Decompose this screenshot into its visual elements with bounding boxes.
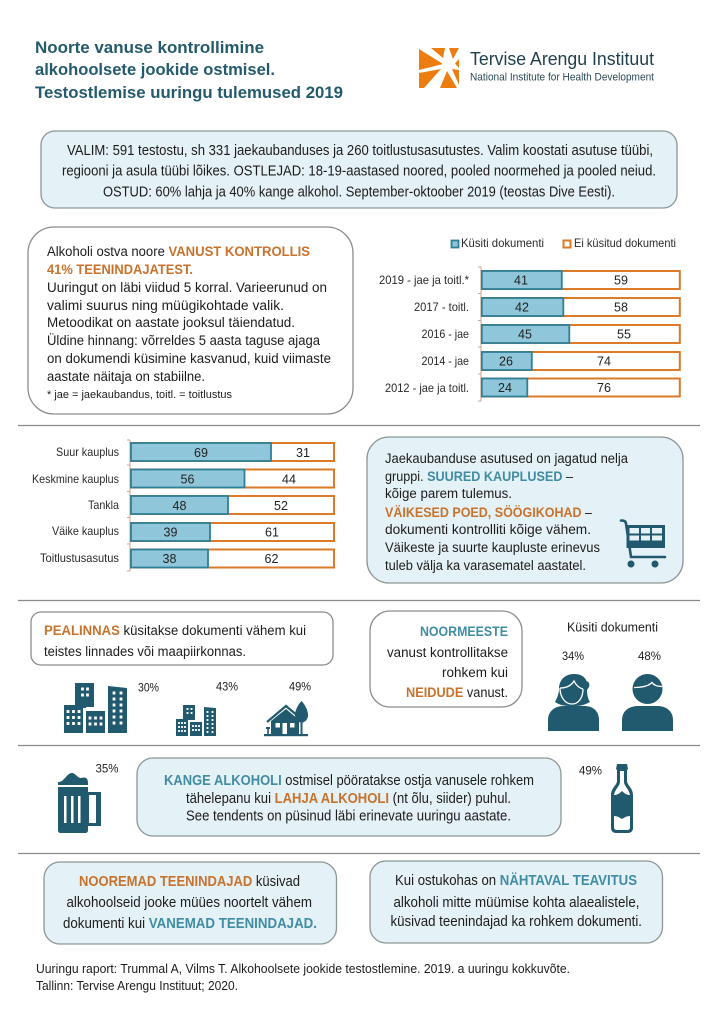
- icon: bottle: [611, 764, 633, 833]
- value: male: 48%: [638, 649, 661, 663]
- logo: Tervise Arengu Instituut: National Institute for Health Development: [470, 72, 654, 84]
- panel: age control summary: Üldine hinnang: võrreldes 5 aasta taguse ajaga: [47, 333, 320, 348]
- value: female: 34%: [562, 649, 584, 663]
- panel: capital city callout: PEALINNAS küsitakse dokumenti vähem kui: [44, 623, 306, 638]
- panel: age control summary: 41% TEENINDAJATEST.: [47, 262, 193, 277]
- bar chart: document checks by survey year: 42: [515, 300, 529, 314]
- panel: age control summary: Metoodikat on aastate jooksul täiendatud.: [47, 315, 295, 330]
- bar chart: document checks by outlet type: 52: [274, 499, 288, 513]
- bar chart: document checks by survey year: 45: [518, 328, 532, 342]
- bar chart: document checks by survey year: 2017 - toitl.: [414, 300, 469, 314]
- title: [35, 38, 343, 102]
- panel: younger vs older servers: NOOREMAD TEENINDAJAD küsivad: [79, 874, 300, 890]
- panel: younger vs older servers: dokumenti kui VANEMAD TEENINDAJAD.: [63, 916, 317, 932]
- panel: capital city callout: teistes linnades või maapiirkonnas.: [44, 644, 246, 659]
- icon: man: [622, 672, 673, 731]
- panel: retail outlet groups: VÄIKESED POED, SÖÖGIKOHAD –: [385, 505, 592, 520]
- bar chart: document checks by outlet type: 44: [282, 472, 296, 486]
- bar chart: document checks by outlet type: Tankla: [88, 498, 119, 512]
- bar chart: document checks by survey year: 76: [597, 381, 611, 395]
- bar chart: document checks by survey year: 24: [498, 381, 512, 395]
- source note: Tallinn: Tervise Arengu Instituut; 2020.: [36, 979, 238, 993]
- logo: Tervise Arengu Instituut: Tervise Arengu Instituut: [470, 49, 654, 69]
- bar chart: document checks by survey year: 58: [614, 300, 628, 314]
- panel: gender callout: [370, 611, 522, 707]
- bar chart: document checks by survey year: 55: [617, 328, 631, 342]
- bar chart: document checks by survey year: 26: [499, 354, 513, 368]
- panel: visible notice: Kui ostukohas on NÄHTAVAL TEAVITUS: [395, 872, 637, 889]
- panel: sample description: VALIM: 591 testostu, sh 331 jaekaubanduses ja 260 toitlustusasutustes. Valim koostati asutuse tüübi,: [67, 143, 653, 159]
- panel: capital city callout: [31, 612, 333, 665]
- bar chart: document checks by outlet type: 56: [181, 472, 194, 486]
- panel: visible notice: küsivad teenindajad ka rohkem dokumenti.: [390, 914, 642, 930]
- panel: strong vs light alcohol: KANGE ALKOHOLI ostmisel pööratakse ostja vanusele rohkem: [164, 773, 534, 789]
- bar chart: document checks by outlet type: 48: [173, 499, 186, 513]
- icon: shopping cart: [621, 520, 665, 568]
- icon: small town buildings: [176, 705, 216, 736]
- bar chart: document checks by outlet type: Toitlustusasutus: [40, 551, 119, 565]
- chart legend: Ei küsitud dokumenti: [574, 236, 676, 250]
- title: Testostlemise uuringu tulemused 2019: [35, 83, 343, 102]
- panel: gender callout: vanust kontrollitakse: [387, 645, 508, 660]
- panel: age control summary: Alkoholi ostva noore VANUST KONTROLLIS: [47, 244, 310, 259]
- panel: retail outlet groups: [367, 437, 683, 583]
- panel: retail outlet groups: Väikeste ja suurte kaupluste erinevus: [385, 540, 600, 555]
- panel: sample description: [41, 131, 677, 208]
- bar chart: document checks by outlet type: 31: [296, 446, 310, 460]
- panel: sample description: OSTUD: 60% lahja ja 40% kange alkohol. September-oktoober 2019 (teostas Dive Eesti).: [103, 184, 615, 200]
- panel: gender callout: NOORMEESTE: [420, 624, 508, 639]
- bar chart: document checks by survey year: 41: [514, 274, 528, 288]
- bar chart: document checks by outlet type: Keskmine kauplus: [32, 472, 119, 486]
- panel: retail outlet groups: dokumenti kontrolliti kõige vähem.: [385, 522, 591, 537]
- bar chart: document checks by outlet type: 61: [265, 526, 279, 540]
- value: large city: 30%: [138, 680, 159, 694]
- panel: age control summary: Uuringut on läbi viidud 5 korral. Varieerunud on: [47, 280, 327, 295]
- value: strong alcohol note: 35%: [96, 762, 119, 776]
- bar chart: document checks by outlet type: 39: [164, 526, 177, 540]
- panel: younger vs older servers: [44, 862, 336, 944]
- icon: beer mug: [58, 773, 101, 833]
- panel: retail outlet groups: Jaekaubanduse asutused on jagatud nelja: [385, 451, 628, 466]
- bar chart: document checks by survey year: 2014 - jae: [422, 354, 469, 368]
- bar chart: document checks by survey year: 2016 - jae: [422, 327, 469, 341]
- bar chart: document checks by outlet type: Väike kauplus: [52, 524, 119, 538]
- panel: retail outlet groups: gruppi. SUURED KAUPLUSED –: [385, 469, 573, 484]
- bar chart: document checks by survey year: 2019 - jae ja toitl.*: [379, 273, 469, 287]
- chart legend: [452, 236, 676, 250]
- panel: strong vs light alcohol: [137, 758, 561, 836]
- panel: strong vs light alcohol: tähelepanu kui LAHJA ALKOHOLI (nt õlu, siider) puhul.: [186, 791, 511, 807]
- panel: visible notice: alkoholi mitte müümise kohta alaealistele,: [394, 895, 640, 911]
- value: town: 43%: [216, 680, 238, 694]
- title: alkohoolsete jookide ostmisel.: [35, 60, 275, 79]
- panel: gender callout: rohkem kui: [442, 665, 508, 680]
- title: Noorte vanuse kontrollimine: [35, 38, 264, 57]
- bar chart: document checks by survey year: [379, 267, 680, 401]
- panel: younger vs older servers: alkohoolseid jooke müües noortelt vähem: [66, 895, 312, 911]
- panel: age control summary: valimi suurus ning müügikohtade valik.: [47, 298, 284, 313]
- bar chart: document checks by outlet type: Suur kauplus: [56, 445, 119, 459]
- source note: Uuringu raport: Trummal A, Vilms T. Alkohoolsete jookide testostlemine. 2019. a uuringu kokkuvõte.: [36, 962, 570, 976]
- source note: [36, 962, 570, 993]
- panel: strong vs light alcohol: See tendents on püsinud läbi erinevate uuringu aastate.: [186, 808, 511, 824]
- bar chart: document checks by outlet type: 62: [265, 552, 278, 566]
- panel: retail outlet groups: tuleb välja ka varasematel aastatel.: [385, 558, 586, 573]
- bar chart: document checks by survey year: 59: [614, 274, 628, 288]
- panel: age control summary: on dokumendi küsimine kasvanud, kuid viimaste: [47, 351, 331, 366]
- chart legend: Küsiti dokumenti: [461, 236, 544, 250]
- logo: Tervise Arengu Instituut: [419, 48, 654, 88]
- value: rural: 49%: [289, 680, 311, 694]
- icon: woman: [548, 674, 599, 731]
- bar chart: document checks by survey year: 2012 - jae ja toitl.: [385, 381, 469, 395]
- panel: age control summary: * jae = jaekaubandus, toitl. = toitlustus: [47, 389, 232, 401]
- icon: large city buildings: [64, 683, 127, 733]
- value: light alcohol note: 49%: [579, 764, 602, 778]
- panel: visible notice: [370, 861, 662, 943]
- bar chart: document checks by outlet type: 69: [194, 446, 208, 460]
- panel: gender callout: NEIDUDE vanust.: [406, 685, 508, 700]
- heading: document asked by gender: Küsiti dokumenti: [567, 620, 658, 634]
- panel: age control summary: [28, 227, 353, 414]
- panel: retail outlet groups: kõige parem tulemus.: [385, 486, 512, 501]
- panel: sample description: regiooni ja asula tüübi lõikes. OSTLEJAD: 18-19-aastased noored, pooled noormehed ja pooled neiud.: [62, 164, 656, 180]
- bar chart: document checks by outlet type: 38: [163, 552, 176, 566]
- icon: rural house with tree: [264, 701, 308, 736]
- panel: age control summary: aastate näitaja on stabiilne.: [47, 369, 205, 384]
- bar chart: document checks by outlet type: [32, 440, 334, 571]
- bar chart: document checks by survey year: 74: [597, 354, 611, 368]
